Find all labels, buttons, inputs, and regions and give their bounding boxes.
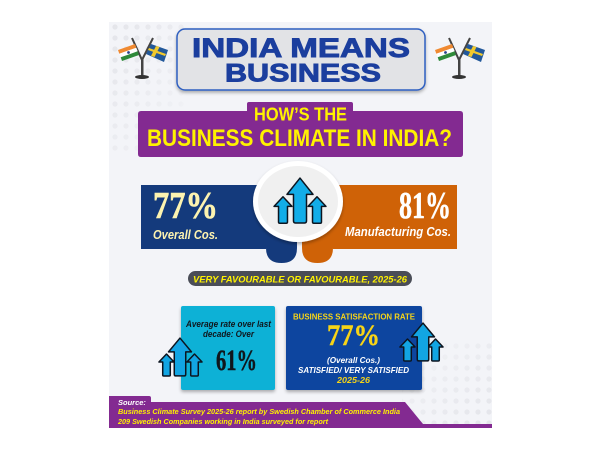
panel: manufacturing companies: Manufacturing Cos. — [345, 224, 451, 239]
title: BUSINESS — [225, 60, 381, 88]
panel: business satisfaction rate: 77% — [327, 319, 380, 352]
source band: 209 Swedish Companies working in India surveyed for report — [117, 417, 328, 426]
background panel — [109, 22, 492, 428]
icon: central circle with up arrows — [253, 161, 343, 242]
title: INDIA MEANS — [192, 33, 410, 63]
infographic canvas — [109, 22, 492, 428]
icon: India and Sweden flags, right — [435, 38, 485, 79]
heading banner: BUSINESS CLIMATE IN INDIA? — [147, 125, 452, 152]
heading banner: HOW’S THE — [254, 104, 347, 124]
panel: manufacturing companies — [302, 185, 457, 263]
panel: business satisfaction rate: BUSINESS SATISFACTION RATE — [293, 312, 415, 322]
source band — [109, 396, 492, 428]
panel: overall companies: 77% — [153, 185, 218, 227]
panel: overall companies: Overall Cos. — [153, 227, 218, 242]
panel: average rate: 61% — [216, 344, 257, 377]
icon: arrows on satisfaction panel — [400, 323, 443, 361]
panel: average rate — [181, 306, 275, 390]
panel: business satisfaction rate: (Overall Cos.) — [327, 355, 380, 365]
panel: manufacturing companies: 81% — [399, 185, 451, 227]
caption pill: VERY FAVOURABLE OR FAVOURABLE, 2025-26 — [193, 274, 408, 286]
panel: business satisfaction rate: SATISFIED/ VERY SATISFIED — [298, 365, 409, 375]
panel: business satisfaction rate — [286, 306, 422, 390]
icon: India and Sweden flags, left — [118, 38, 168, 79]
icon: arrows on average rate panel — [159, 338, 202, 376]
decorative dots — [112, 24, 172, 138]
panel: average rate: Average rate over last — [185, 319, 272, 330]
title — [177, 29, 425, 90]
source band: Business Climate Survey 2025-26 report by Swedish Chamber of Commerce India — [118, 407, 400, 416]
panel: average rate: decade: Over — [203, 329, 255, 340]
panel: business satisfaction rate: 2025-26 — [336, 375, 370, 385]
panel: overall companies — [141, 185, 297, 263]
source band: Source: — [118, 398, 146, 407]
heading banner — [138, 102, 463, 157]
